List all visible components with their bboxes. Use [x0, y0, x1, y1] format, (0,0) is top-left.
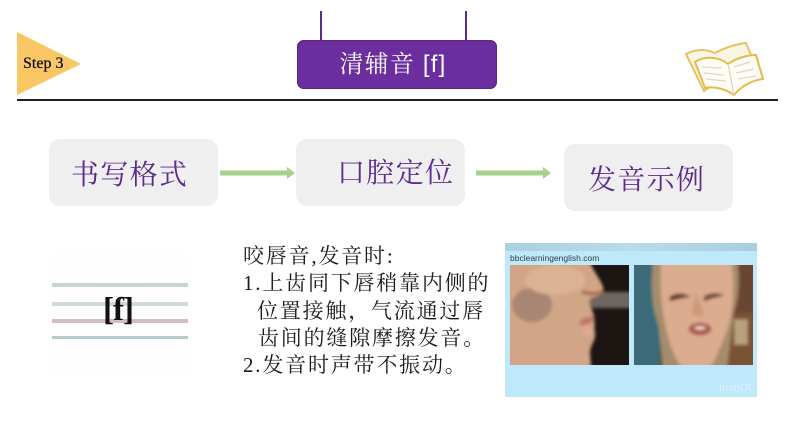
description text: 咬唇音,发音时: [243, 244, 394, 268]
description text: 2.发音时声带不振动。 [243, 353, 468, 377]
panel: writing format [49, 139, 218, 206]
step label: Step 3 [23, 55, 63, 72]
title banner [297, 40, 497, 89]
description text: 位置接触，气流通过唇 [257, 299, 485, 323]
video screenshot [505, 243, 757, 397]
site url: bbclearningenglish.com [510, 253, 599, 263]
panel: mouth position [296, 139, 465, 206]
description text: 1.上齿同下唇稍靠内侧的 [243, 271, 490, 295]
panel: pronunciation example [564, 144, 733, 211]
description text [243, 244, 490, 377]
label: pronunciation example: 发音示例 [588, 165, 705, 196]
video top bar [505, 243, 757, 251]
staff line 4 [52, 336, 188, 339]
arrow 1 [220, 167, 295, 179]
phonetic writing card [52, 252, 188, 376]
staff line 2 [52, 302, 188, 306]
staff line 3 [52, 319, 188, 323]
video frame: front face [634, 265, 753, 365]
video frame: side profile [510, 265, 629, 365]
title banner: 清辅音 [f] [339, 51, 447, 78]
watermark: InshOt [719, 382, 751, 394]
hanging line left [320, 11, 322, 41]
label: writing format: 书写格式 [71, 160, 188, 191]
header rule [17, 99, 778, 101]
step marker triangle [17, 32, 81, 95]
icon: open book [684, 42, 764, 96]
phonetic symbol: [f] [103, 292, 133, 328]
hanging line right [465, 11, 467, 41]
staff line 1 [52, 283, 188, 287]
label: mouth position: 口腔定位 [337, 158, 454, 189]
arrow 2 [476, 167, 551, 179]
description text: 齿间的缝隙摩擦发音。 [258, 326, 486, 350]
